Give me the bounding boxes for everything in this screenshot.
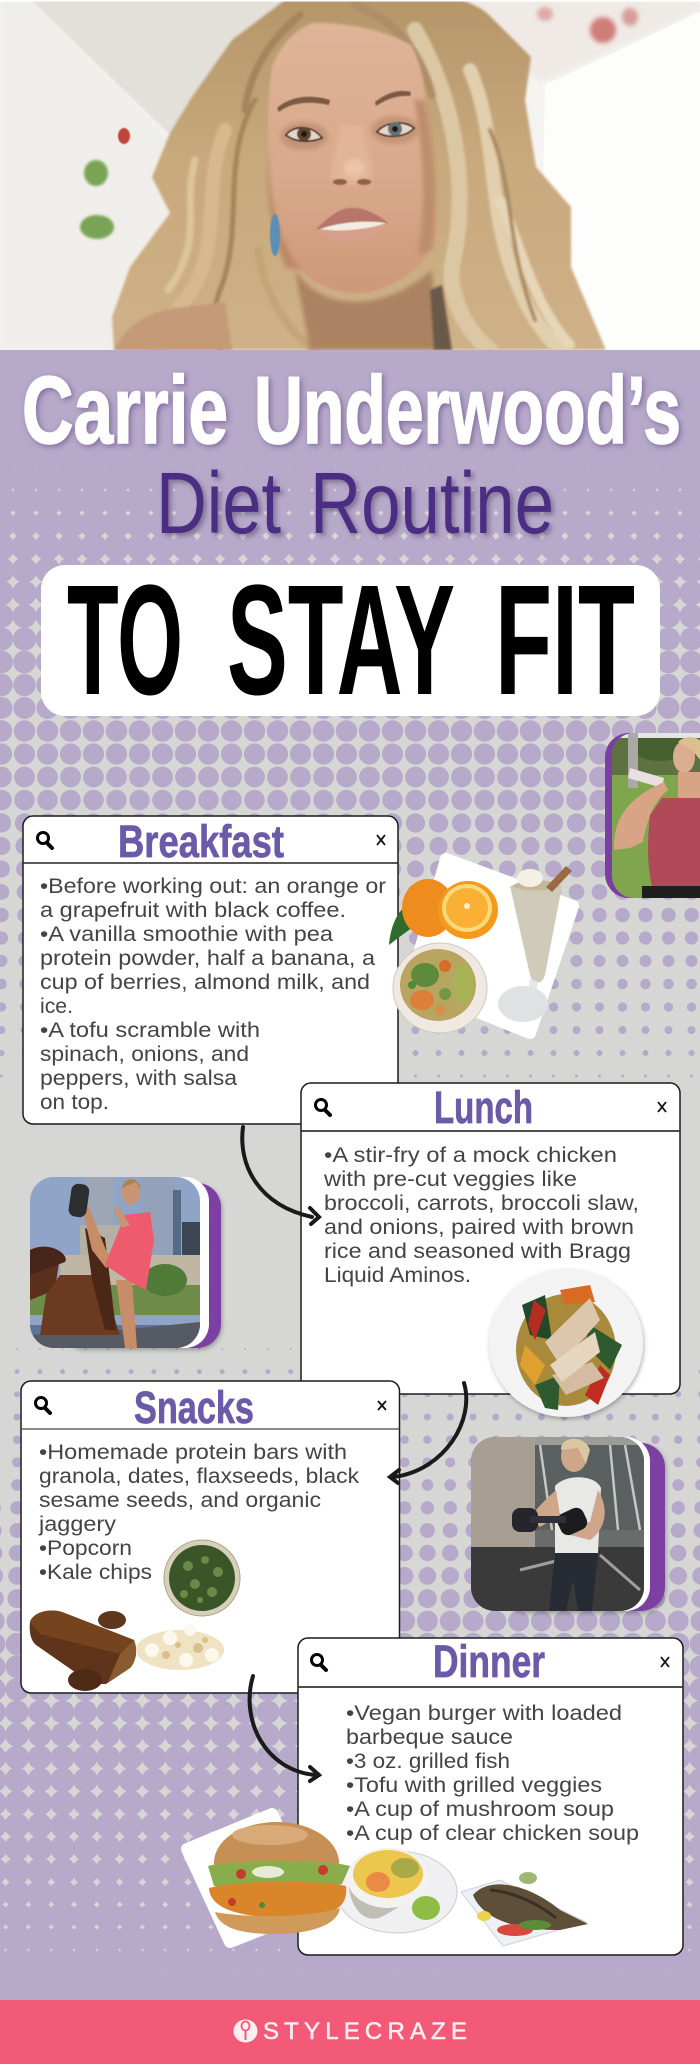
text: dinner list: •Tofu with grilled veggies — [346, 1774, 602, 1797]
text: breakfast list: •A tofu scramble with — [40, 1019, 260, 1042]
icon: close — [377, 835, 385, 845]
hair — [112, 0, 606, 350]
text: breakfast list: protein powder, half a banana, a — [40, 947, 375, 970]
text: snacks list: •Popcorn — [39, 1537, 132, 1560]
text: dinner list — [346, 1702, 639, 1845]
text: stylecraze: STYLECRAZE — [263, 2018, 467, 2045]
text: snacks list: sesame seeds, and organic — [39, 1489, 321, 1512]
icon: close — [661, 1657, 669, 1667]
text: lunch list: •A stir-fry of a mock chicken — [324, 1144, 617, 1167]
panel: snacks — [21, 1381, 400, 1693]
icon: soup plate — [337, 1848, 457, 1933]
eyebrows — [277, 97, 330, 112]
lips — [316, 208, 388, 241]
icon: veggie burger — [208, 1822, 350, 1934]
icon: search — [38, 832, 52, 848]
text: lunch list: rice and seasoned with Bragg — [324, 1240, 631, 1263]
image: breakfast foods — [389, 859, 573, 1033]
face — [268, 23, 436, 293]
text: breakfast list: peppers, with salsa — [40, 1067, 237, 1090]
text: dinner list: •3 oz. grilled fish — [346, 1750, 510, 1773]
text: breakfast list: on top. — [40, 1091, 109, 1114]
image: dinner foods — [187, 1814, 588, 1946]
heading: Carrie Underwood's — [22, 357, 681, 464]
icon: search — [312, 1654, 326, 1670]
text: snacks list: •Kale chips — [39, 1561, 152, 1584]
text: lunch list: and onions, paired with brown — [324, 1216, 634, 1239]
text: lunch list: with pre-cut veggies like — [323, 1168, 577, 1191]
text: breakfast list: spinach, onions, and — [40, 1043, 249, 1066]
neck and shoulder — [114, 302, 232, 350]
text: lunch list — [323, 1144, 639, 1287]
text: dinner list: •A cup of clear chicken soup — [346, 1822, 639, 1845]
hero portrait photo — [0, 0, 700, 350]
panel: lunch — [301, 1082, 680, 1394]
text: breakfast list — [40, 875, 386, 1114]
arrow: lunch to snacks — [390, 1383, 466, 1483]
text: snacks list: •Homemade protein bars with — [39, 1441, 347, 1464]
photo: dumbbell curl — [471, 1437, 665, 1611]
heading: Diet Routine: Routine — [310, 455, 554, 552]
icon: orange leaf — [389, 896, 440, 945]
banner: to stay fit: TO — [67, 553, 183, 728]
photo: drinking water — [605, 729, 700, 898]
text: dinner list: •A cup of mushroom soup — [346, 1798, 614, 1821]
arrow: breakfast to lunch — [242, 1127, 319, 1224]
banner: to stay fit — [41, 553, 660, 728]
icon: grilled fish plate — [461, 1872, 588, 1946]
icon: kale bowl — [164, 1540, 240, 1616]
text: lunch list: broccoli, carrots, broccoli slaw, — [324, 1192, 639, 1215]
title — [22, 357, 681, 728]
image: chicken stir-fry plate — [489, 1269, 643, 1417]
heading: snacks: Snacks — [134, 1382, 254, 1433]
text: breakfast list: ice. — [40, 995, 73, 1018]
arrow: snacks to dinner — [250, 1676, 319, 1781]
icon: stylecraze logo — [234, 2020, 258, 2042]
heading: dinner: Dinner — [433, 1636, 545, 1687]
earring — [270, 214, 280, 256]
text: snacks list: granola, dates, flaxseeds, black — [39, 1465, 360, 1488]
text: snacks list — [38, 1441, 360, 1584]
card: burger backing — [187, 1814, 316, 1942]
icon: orange half — [438, 881, 498, 939]
text: snacks list: jaggery — [38, 1513, 117, 1536]
icon: protein bar — [30, 1610, 136, 1691]
icon: close — [378, 1401, 386, 1410]
text: breakfast list: •Before working out: an orange or — [40, 875, 386, 898]
text: dinner list: •Vegan burger with loaded — [346, 1702, 622, 1725]
heading: lunch: Lunch — [434, 1082, 533, 1133]
icon: salad bowl — [393, 943, 487, 1033]
icon: search — [316, 1100, 330, 1115]
heading: Diet Routine: Diet — [156, 455, 281, 552]
heading: breakfast: Breakfast — [118, 816, 284, 867]
text: breakfast list: cup of berries, almond milk, and — [40, 971, 370, 994]
text: lunch list: Liquid Aminos. — [324, 1264, 471, 1287]
heading: Diet Routine — [156, 455, 554, 552]
banner: to stay fit: STAY — [227, 553, 455, 728]
panel: breakfast — [23, 816, 398, 1124]
icon: search — [36, 1398, 50, 1413]
footer bar — [0, 2000, 700, 2064]
icon: smoothie glass — [498, 866, 572, 1022]
icon: popcorn — [136, 1624, 224, 1670]
photo: high kick — [30, 1177, 221, 1348]
panel: dinner — [298, 1636, 683, 1955]
eyes — [286, 122, 414, 141]
heading: Carrie Underwood's: Carrie — [22, 357, 228, 464]
icon: whole orange — [402, 879, 454, 937]
icon: close — [658, 1102, 666, 1112]
text: dinner list: barbeque sauce — [346, 1726, 513, 1749]
text: breakfast list: a grapefruit with black coffee. — [40, 899, 346, 922]
text: breakfast list: •A vanilla smoothie with pea — [40, 923, 333, 946]
